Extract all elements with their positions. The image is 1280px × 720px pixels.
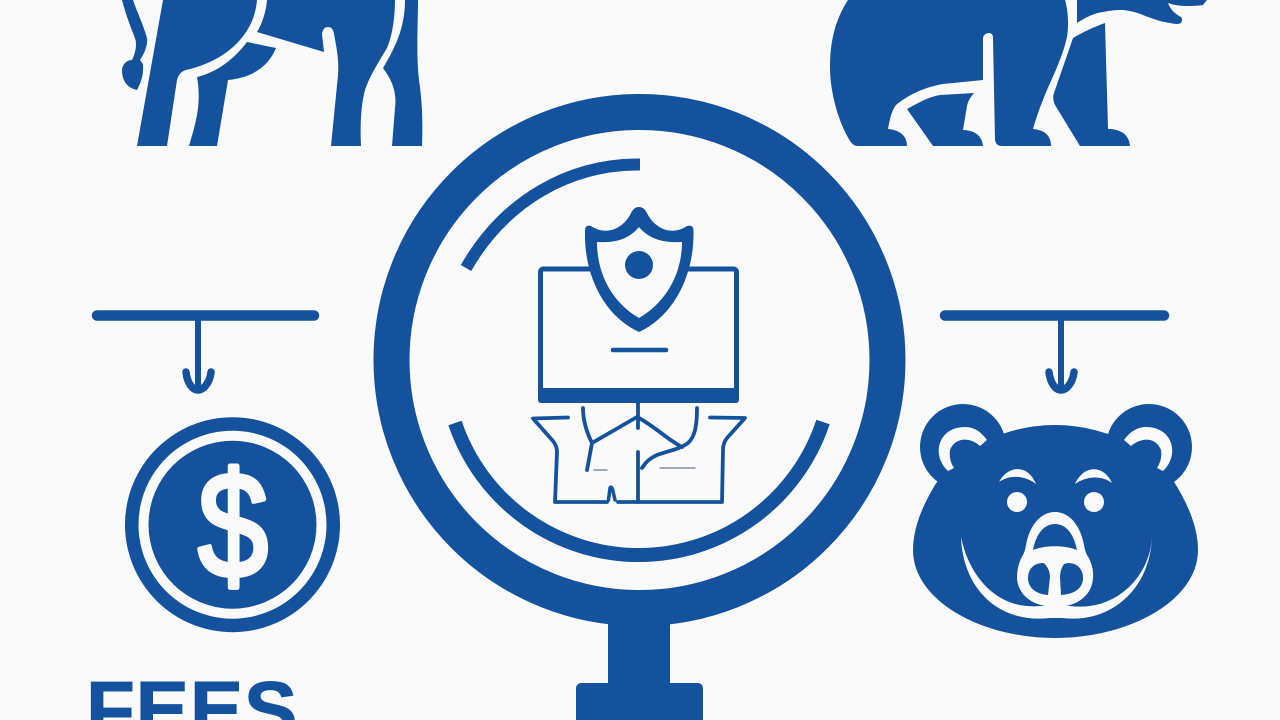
- icon: dollar coin: [125, 417, 340, 632]
- icon: bear body (cropped at top right): [830, 0, 1207, 146]
- smile: [961, 537, 1152, 619]
- connector: left bar and down arrow: [97, 316, 314, 390]
- inner ears: [939, 427, 987, 471]
- magnifier handle: [608, 600, 670, 700]
- monitor dash: [613, 348, 666, 352]
- icon: magnifying glass: [392, 112, 888, 720]
- icon: monitor with shield and open box: [533, 207, 745, 502]
- magnifier base: [576, 683, 703, 720]
- snout: [1017, 512, 1093, 607]
- connector: right bar and down arrow: [945, 316, 1164, 390]
- dollar sign: $: [198, 443, 268, 609]
- eyes: [1007, 492, 1027, 512]
- icon: bull body (cropped at top left): [122, 0, 422, 146]
- upper lens arc: [466, 164, 640, 268]
- icon: bear face: [913, 404, 1198, 638]
- head: [913, 425, 1198, 638]
- monitor frame: [540, 269, 736, 399]
- lower lens arc: [455, 422, 823, 555]
- eyebrows: [999, 469, 1036, 484]
- open box outline: [533, 403, 745, 502]
- ears: [920, 404, 1006, 490]
- shield: [585, 207, 694, 332]
- monitor bottom bar: [538, 388, 739, 403]
- magnifier ring: [392, 112, 888, 608]
